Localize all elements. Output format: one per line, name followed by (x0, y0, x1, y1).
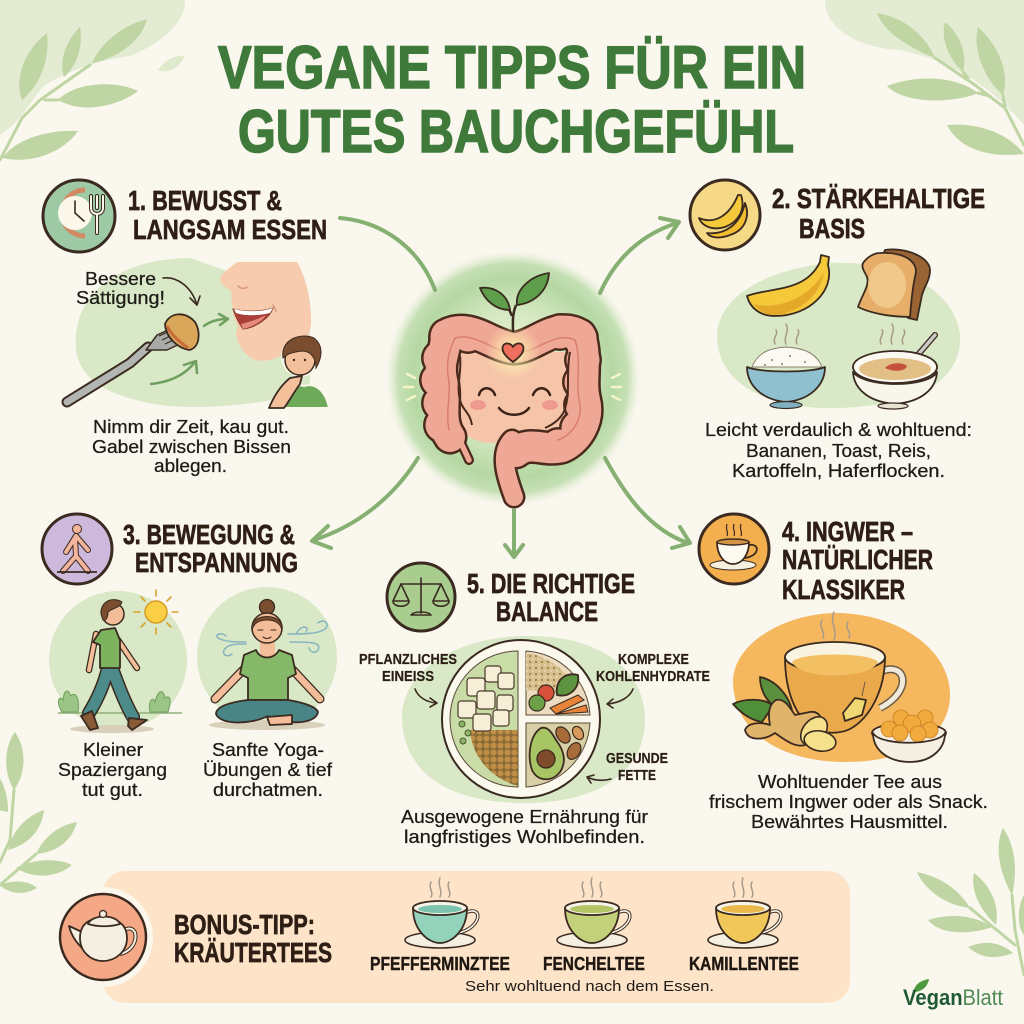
tea names: FENCHELTEE (543, 954, 645, 974)
icon: teapot (53, 887, 153, 987)
text block: yoga: Sanfte Yoga- (212, 740, 324, 760)
rectum outline (505, 440, 514, 497)
label: fats: GESUNDE (606, 751, 668, 767)
decoration: top-left leaves (0, 0, 185, 160)
walker legs (89, 668, 133, 717)
tofu (458, 666, 514, 731)
label: carbs: KOHLENHYDRATE (596, 669, 710, 685)
title: GUTES BAUCHGEFÜHL (238, 98, 794, 165)
icon: tea cup (699, 514, 769, 584)
panel: tip 1 (43, 180, 329, 476)
title (218, 34, 806, 165)
text block: Gabel zwischen Bissen (92, 437, 291, 457)
text block: yoga: durchatmen. (213, 780, 323, 800)
heading: BONUS-TIPP: (174, 909, 315, 940)
toast (880, 249, 930, 320)
arrow: centre to tip 1 (340, 218, 435, 290)
text block: Leicht verdaulich & wohltuend: (705, 420, 972, 440)
heading: 1. BEWUSST & (128, 185, 282, 216)
tea names: KAMILLENTEE (689, 954, 799, 974)
icon: chamomile tea (708, 878, 781, 948)
walker arms (89, 634, 96, 670)
sparkles (404, 374, 621, 400)
arrow: centre to tip 2 (600, 218, 679, 293)
icon: walking person (42, 514, 112, 584)
heading (174, 909, 332, 968)
panel: tip 2 (690, 180, 985, 481)
avocado (530, 728, 564, 779)
text block: Kartoffeln, Haferflocken. (732, 461, 945, 481)
heading: 4. INGWER – (782, 516, 913, 547)
oat bowl (910, 335, 935, 364)
icon: fennel tea (557, 878, 630, 948)
text block: yoga (203, 740, 333, 800)
label: protein: EINEISS (382, 669, 434, 685)
text block: walk: Kleiner (83, 740, 143, 760)
steam (774, 324, 799, 344)
head (260, 600, 274, 614)
icon: balance scale (387, 563, 455, 631)
decoration: bottom-right leaves (917, 828, 1024, 975)
fat quarter (526, 723, 590, 787)
face (479, 388, 550, 415)
fork and bread (67, 347, 148, 402)
panel: tip 5 (359, 563, 710, 847)
belly (458, 352, 570, 443)
arms (215, 668, 320, 699)
sprout (508, 305, 516, 332)
tea bag (862, 682, 865, 696)
child figure (281, 337, 321, 377)
text block: Ausgewogene Ernährung für (401, 807, 648, 827)
logo: VeganBlatt: VeganBlatt (903, 985, 1003, 1010)
heading: 5. DIE RICHTIGE (467, 568, 635, 599)
label: protein: PFLANZLICHES (359, 652, 457, 668)
text block: Bewährtes Hausmittel. (751, 812, 948, 832)
steam (821, 612, 850, 640)
label: carbs: KOMPLEXE (618, 652, 689, 668)
text block (705, 420, 972, 481)
label: fats (587, 751, 668, 784)
illustration: yoga (197, 587, 337, 730)
small arrows (204, 314, 228, 326)
glowing heart (485, 324, 541, 380)
appendix (462, 445, 469, 460)
heading (782, 516, 933, 605)
text block: yoga: Übungen & tief (203, 760, 333, 780)
icon: clock and fork (43, 180, 115, 252)
callout: satiety: Bessere (85, 269, 156, 289)
heading (123, 519, 298, 578)
callout: satiety: Sättigung! (76, 288, 165, 308)
heading: LANGSAM ESSEN (133, 214, 327, 245)
text block (401, 807, 648, 847)
lentils (468, 730, 518, 788)
heading: KRÄUTERTEES (174, 937, 332, 968)
candied ginger bowl (872, 723, 946, 743)
callout: satiety (76, 269, 165, 308)
rice bowl (752, 347, 822, 367)
panel: tip 4 (699, 514, 988, 832)
illustration: walking (49, 590, 187, 733)
vegetables (557, 674, 578, 696)
colon fill (422, 316, 600, 460)
panel: bonus tip (53, 871, 850, 1003)
heading: 3. BEWEGUNG & (123, 519, 295, 550)
icon: peppermint tea (405, 878, 478, 948)
text block: walk: Spaziergang (58, 760, 167, 780)
illustration: eating slowly (67, 258, 329, 408)
decoration: top-right leaves (825, 0, 1024, 155)
cup handle (880, 669, 903, 708)
ginger (745, 700, 821, 746)
inner contour (459, 352, 570, 428)
decoration: bottom-left leaves (0, 732, 77, 893)
heading: ENTSPANNUNG (135, 547, 298, 578)
peas (459, 721, 471, 744)
heading: KLASSIKER (782, 574, 905, 605)
nuts (553, 724, 586, 762)
heading (772, 183, 985, 244)
arrow: centre to tip 4 (605, 458, 690, 548)
neck (260, 640, 275, 662)
caption: Sehr wohltuend nach dem Essen. (465, 978, 714, 995)
text block: Nimm dir Zeit, kau gut. (93, 417, 289, 437)
label: protein (359, 652, 457, 707)
central illustration: happy gut with sprout (385, 250, 641, 506)
text block: Bananen, Toast, Reis, (746, 441, 931, 461)
heading (467, 568, 635, 627)
text block: frischem Ingwer oder als Snack. (709, 792, 988, 812)
tea names (370, 954, 799, 974)
heading: BASIS (799, 213, 865, 244)
text block: walk: tut gut. (82, 780, 143, 800)
colon outline (419, 313, 602, 463)
text block (92, 417, 291, 476)
label: fats: FETTE (618, 768, 656, 784)
text block: walk (58, 740, 167, 800)
wind (288, 621, 327, 652)
illustration: ginger tea (733, 612, 950, 762)
sun (145, 601, 167, 623)
banana (747, 255, 829, 316)
legs (216, 700, 318, 723)
protein quarter (450, 651, 518, 787)
text block: Wohltuender Tee aus (758, 772, 942, 792)
panel: tip 3 (42, 514, 337, 800)
icon: bananas (690, 180, 760, 250)
text block: langfristiges Wohlbefinden. (404, 827, 645, 847)
heading (128, 185, 327, 245)
illustration: starchy foods (717, 249, 960, 409)
arrow: centre to tip 3 (312, 458, 418, 548)
carbs quarter (526, 651, 590, 715)
torso (240, 650, 296, 700)
heading: NATÜRLICHER (782, 544, 933, 575)
heading: BALANCE (496, 596, 598, 627)
plate chart (402, 636, 645, 803)
arrow: centre to tip 5 (505, 510, 523, 557)
grains (526, 653, 572, 693)
label: carbs (596, 652, 710, 708)
text block (709, 772, 988, 832)
cup (785, 657, 885, 733)
leaves (760, 677, 793, 715)
tea names: PFEFFERMINZTEE (370, 954, 510, 974)
title: VEGANE TIPPS FÜR EIN (218, 34, 806, 101)
text block: ablegen. (154, 456, 227, 476)
